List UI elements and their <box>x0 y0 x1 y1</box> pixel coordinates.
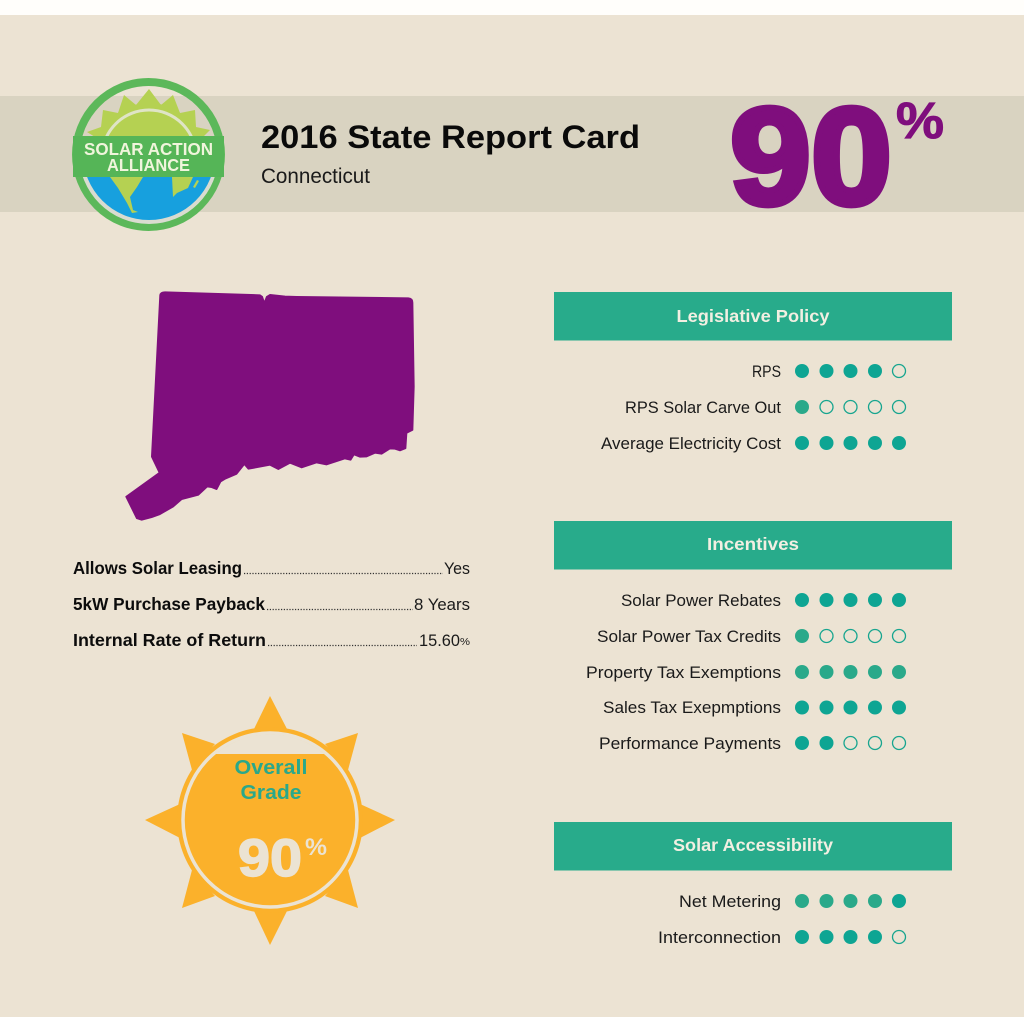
row: performance payments <box>599 734 906 753</box>
overall grade sun badge <box>145 696 395 945</box>
fact: allows solar leasing: Allows Solar Leasing <box>73 558 242 578</box>
panel: incentives <box>554 521 952 753</box>
row: solar power tax credits <box>597 627 906 646</box>
fact: internal rate of return: Internal Rate of Return <box>73 630 266 650</box>
overall grade sun badge: 90 <box>238 829 302 888</box>
fact: allows solar leasing <box>73 558 470 578</box>
fact: internal rate of return <box>73 630 470 650</box>
heading: incentives <box>554 521 952 570</box>
fact: 5kW purchase payback: 5kW Purchase Payback <box>73 594 265 614</box>
row: net metering: Net Metering <box>679 892 781 911</box>
row: sales tax exepmptions: Sales Tax Exepmptions <box>603 698 781 717</box>
fact: 5kW purchase payback: 8 Years <box>414 595 470 614</box>
fact: 5kW purchase payback <box>73 594 470 614</box>
header band <box>0 96 1024 212</box>
row: performance payments: Performance Payments <box>599 734 781 753</box>
logo: Solar Action Alliance: ALLIANCE <box>107 155 190 175</box>
row: interconnection: Interconnection <box>658 928 781 947</box>
panel: legislative policy <box>554 292 952 453</box>
heading: legislative policy <box>554 292 952 340</box>
fact: allows solar leasing: Yes <box>444 559 470 578</box>
heading: incentives: Incentives <box>707 534 799 554</box>
overall grade sun badge: % <box>305 834 327 861</box>
panel: solar accessibility <box>554 822 952 947</box>
title: 2016 State Report Card <box>261 119 640 155</box>
row: average electricity cost: Average Electricity Cost <box>601 434 781 453</box>
overall grade sun badge: Grade <box>240 781 302 804</box>
overall grade sun badge: Overall <box>234 756 308 779</box>
row: RPS <box>752 362 906 381</box>
row: RPS solar carve out <box>625 398 906 417</box>
row: property tax exemptions: Property Tax Exemptions <box>586 663 781 682</box>
row: solar power tax credits: Solar Power Tax Credits <box>597 627 781 646</box>
heading: solar accessibility <box>554 822 952 870</box>
logo: Solar Action Alliance: SOLAR ACTION <box>84 139 213 159</box>
row: property tax exemptions <box>586 663 906 682</box>
row: average electricity cost <box>601 434 906 453</box>
row: sales tax exepmptions <box>603 698 906 717</box>
fact: internal rate of return: 15.60 <box>419 631 460 650</box>
big score: % <box>896 92 944 149</box>
fact list <box>73 558 470 650</box>
row: interconnection <box>658 928 906 947</box>
subtitle: state name: Connecticut <box>261 164 370 188</box>
big score: 90 <box>730 80 892 234</box>
state map: Connecticut <box>126 292 414 520</box>
row: RPS: RPS <box>752 362 781 381</box>
row: RPS solar carve out: RPS Solar Carve Out <box>625 398 781 417</box>
row: solar power rebates <box>621 591 906 610</box>
row: net metering <box>679 892 906 911</box>
fact: internal rate of return: % <box>460 637 470 648</box>
logo: Solar Action Alliance <box>73 82 224 227</box>
heading: solar accessibility: Solar Accessibility <box>673 835 833 855</box>
row: solar power rebates: Solar Power Rebates <box>621 591 781 610</box>
heading: legislative policy: Legislative Policy <box>676 306 830 326</box>
